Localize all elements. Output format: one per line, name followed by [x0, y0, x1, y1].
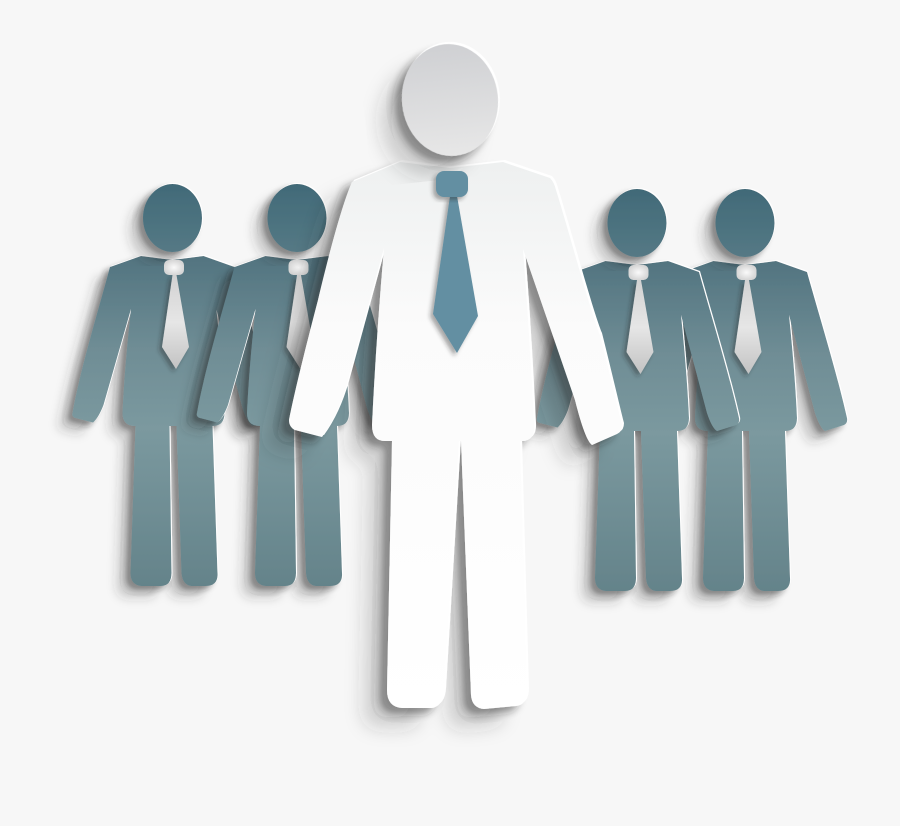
- suit body: [537, 261, 739, 591]
- tie: [734, 280, 762, 374]
- knot: [164, 260, 184, 275]
- knot: [288, 260, 308, 275]
- suit body: [645, 261, 847, 591]
- figure: team member second from right: [537, 189, 739, 591]
- figure: central leader: [289, 39, 622, 709]
- tie: [162, 275, 189, 369]
- leader suit body: [289, 162, 622, 709]
- figure: team member far right: [645, 189, 847, 591]
- head: [268, 184, 326, 252]
- tie: [626, 280, 654, 374]
- head: [143, 184, 202, 252]
- knot: [736, 265, 756, 280]
- leader head: [396, 39, 504, 161]
- head: [608, 189, 666, 257]
- leader tie: [433, 196, 478, 353]
- suit body: [197, 256, 399, 586]
- figure: team member far left: [72, 184, 275, 586]
- knot: [628, 265, 648, 280]
- leader tie knot: [436, 171, 468, 197]
- suit body: [72, 256, 275, 586]
- figure: team member second from left: [197, 184, 399, 586]
- tie: [286, 275, 314, 369]
- head: [716, 189, 774, 257]
